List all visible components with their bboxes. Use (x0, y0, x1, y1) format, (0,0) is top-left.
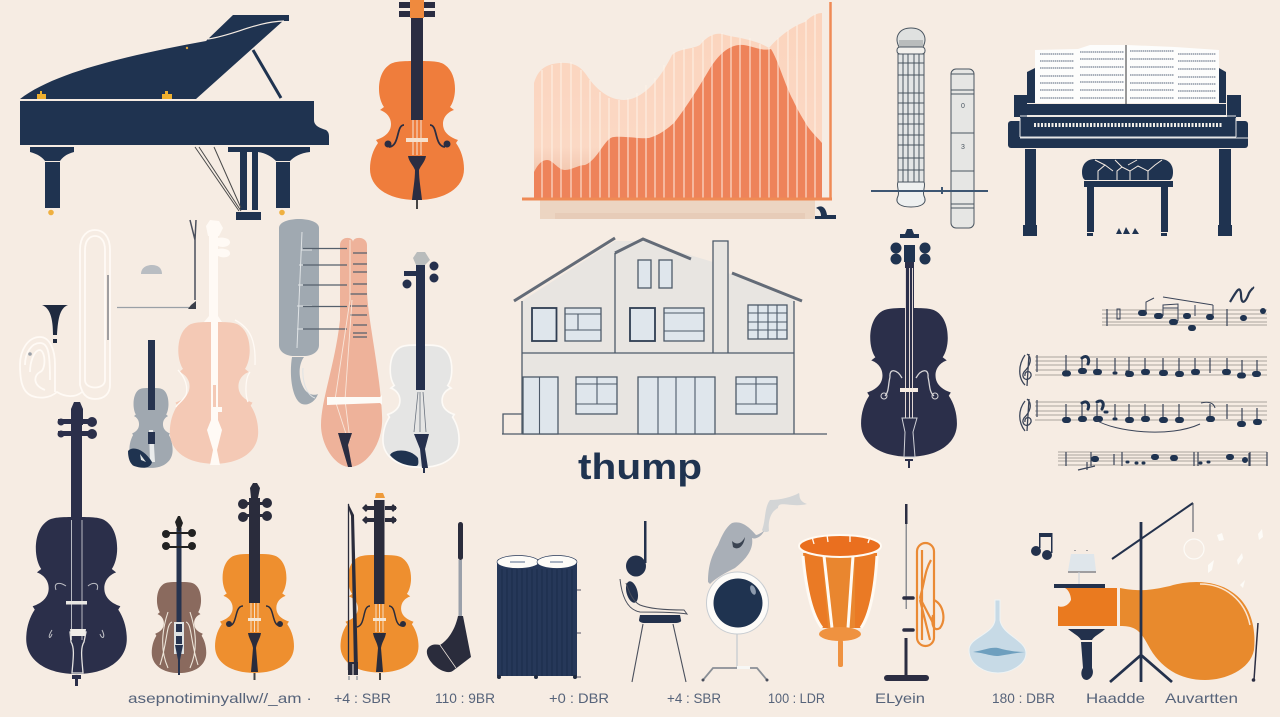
grey tube with hook (279, 219, 319, 405)
column instruments: 0 (961, 103, 965, 110)
caption row: ELyein (875, 690, 925, 706)
orange violin with scroll (215, 483, 294, 680)
column instruments: 3 (961, 144, 965, 151)
mirror with smoke (702, 493, 807, 682)
orange bucket drum (799, 535, 881, 667)
title word: thump (578, 446, 702, 487)
caption row: +0 : DBR (549, 690, 609, 706)
brown violin (152, 516, 206, 675)
stand with trombone (884, 504, 943, 681)
pale grey violin (383, 252, 459, 473)
caption row (128, 690, 1238, 706)
caption row: Haadde (1086, 690, 1145, 706)
mallet (427, 522, 471, 672)
small dome and l-shaped rod (117, 220, 196, 309)
caption row: +4 : SBR (334, 690, 391, 706)
area chart with vertical stripes (522, 2, 836, 219)
grand piano (20, 15, 329, 220)
sheet music (1020, 287, 1267, 470)
caption row: 100 : LDR (768, 690, 825, 706)
orange violin with bow (340, 493, 419, 680)
peach lute with strings (303, 238, 382, 467)
glass flask (969, 600, 1026, 673)
peach cello with white neck (170, 220, 258, 465)
caption row: 180 : DBR (992, 690, 1055, 706)
caption row: Auvartten (1165, 690, 1238, 706)
orange violin (370, 0, 464, 209)
upright piano with sheet music (1008, 45, 1248, 236)
white outline trumpet (20, 230, 110, 399)
column instruments (871, 28, 988, 228)
caption row: +4 : SBR (667, 690, 721, 706)
orange piano with microphone stand (1031, 503, 1263, 682)
caption row: 110 : 9BR (435, 690, 495, 706)
small grey violin (128, 340, 173, 468)
music note and chair (620, 521, 687, 682)
navy cello bottom left (26, 402, 127, 686)
house illustration (502, 238, 827, 434)
twin navy drums (497, 556, 581, 679)
caption row: asepnotiminyallw//_am · (128, 690, 312, 706)
navy cello (861, 229, 957, 468)
